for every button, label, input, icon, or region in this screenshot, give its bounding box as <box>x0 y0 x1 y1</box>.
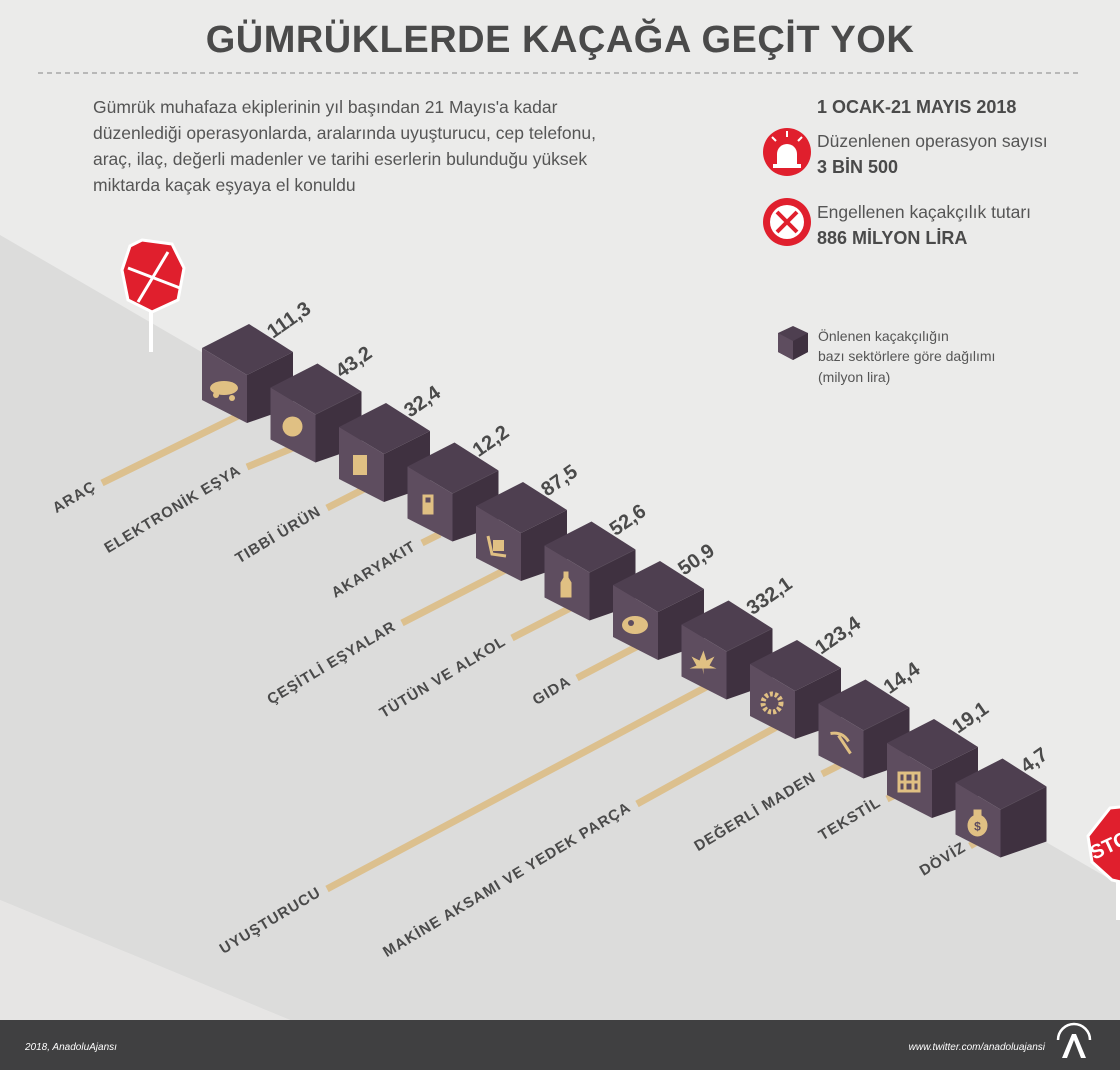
category labels: TÜTÜN VE ALKOL <box>377 633 509 722</box>
category labels: ARAÇ <box>50 478 99 517</box>
category labels: TEKSTİL <box>816 794 884 844</box>
value labels: 52,6 <box>606 500 650 541</box>
legend: (milyon lira) <box>818 369 890 385</box>
footer: 2018, AnadoluAjansı <box>24 1042 117 1053</box>
footer <box>0 1020 1120 1070</box>
legend: Önlenen kaçakçılığın <box>818 327 949 344</box>
stop sign left <box>122 240 184 352</box>
stats panel: 3 BİN 500 <box>817 157 898 177</box>
value labels: 12,2 <box>469 421 513 462</box>
value labels: 4,7 <box>1017 744 1052 778</box>
icon: siren <box>763 128 811 176</box>
value labels <box>263 298 1052 778</box>
stats panel: Düzenlenen operasyon sayısı <box>817 131 1048 151</box>
stop sign right <box>1087 806 1120 920</box>
guide lines <box>102 415 980 889</box>
value labels: 87,5 <box>537 461 582 501</box>
value labels: 14,4 <box>880 658 925 699</box>
intro text: miktarda kaçak eşyaya el konuldu <box>93 175 356 195</box>
category labels: DÖVİZ <box>917 839 969 880</box>
legend: bazı sektörlere göre dağılımı <box>818 348 995 364</box>
value labels: 43,2 <box>332 342 376 383</box>
footer: www.twitter.com/anadoluajansi <box>909 1042 1046 1053</box>
title: GÜMRÜKLERDE KAÇAĞA GEÇİT YOK <box>206 17 914 61</box>
cubes chart <box>202 324 1046 858</box>
category labels: DEĞERLİ MADEN <box>691 768 819 855</box>
intro text <box>93 97 596 195</box>
cubes chart: $ <box>974 820 981 834</box>
intro text: düzenlediği operasyonlarda, aralarında uyuşturucu, cep telefonu, <box>93 123 596 143</box>
category labels: TIBBİ ÜRÜN <box>232 503 324 567</box>
value labels: 111,3 <box>263 298 315 343</box>
legend <box>778 326 995 385</box>
category labels: GIDA <box>530 673 574 709</box>
category labels: UYUŞTURUCU <box>217 884 324 958</box>
category labels: MAKİNE AKSAMI VE YEDEK PARÇA <box>380 799 634 961</box>
stats panel <box>763 97 1048 248</box>
stats panel: Engellenen kaçakçılık tutarı <box>817 202 1031 222</box>
category labels: ÇEŞİTLİ EŞYALAR <box>264 618 399 708</box>
value labels: 123,4 <box>811 612 866 659</box>
category labels: AKARYAKIT <box>329 538 419 602</box>
intro text: araç, ilaç, değerli madenler ve tarihi eserlerin bulunduğu yüksek <box>93 149 587 169</box>
value labels: 50,9 <box>674 540 719 580</box>
logo <box>1058 1024 1090 1058</box>
value labels: 332,1 <box>743 573 796 620</box>
icon: forbidden x <box>763 198 811 246</box>
category labels: ELEKTRONİK EŞYA <box>101 462 244 557</box>
category labels <box>50 462 969 961</box>
value labels: 32,4 <box>400 381 445 422</box>
stats panel: 1 OCAK-21 MAYIS 2018 <box>817 97 1016 117</box>
intro text: Gümrük muhafaza ekiplerinin yıl başından 21 Mayıs'a kadar <box>93 97 558 117</box>
stats panel: 886 MİLYON LİRA <box>817 228 967 248</box>
value labels: 19,1 <box>948 698 993 738</box>
